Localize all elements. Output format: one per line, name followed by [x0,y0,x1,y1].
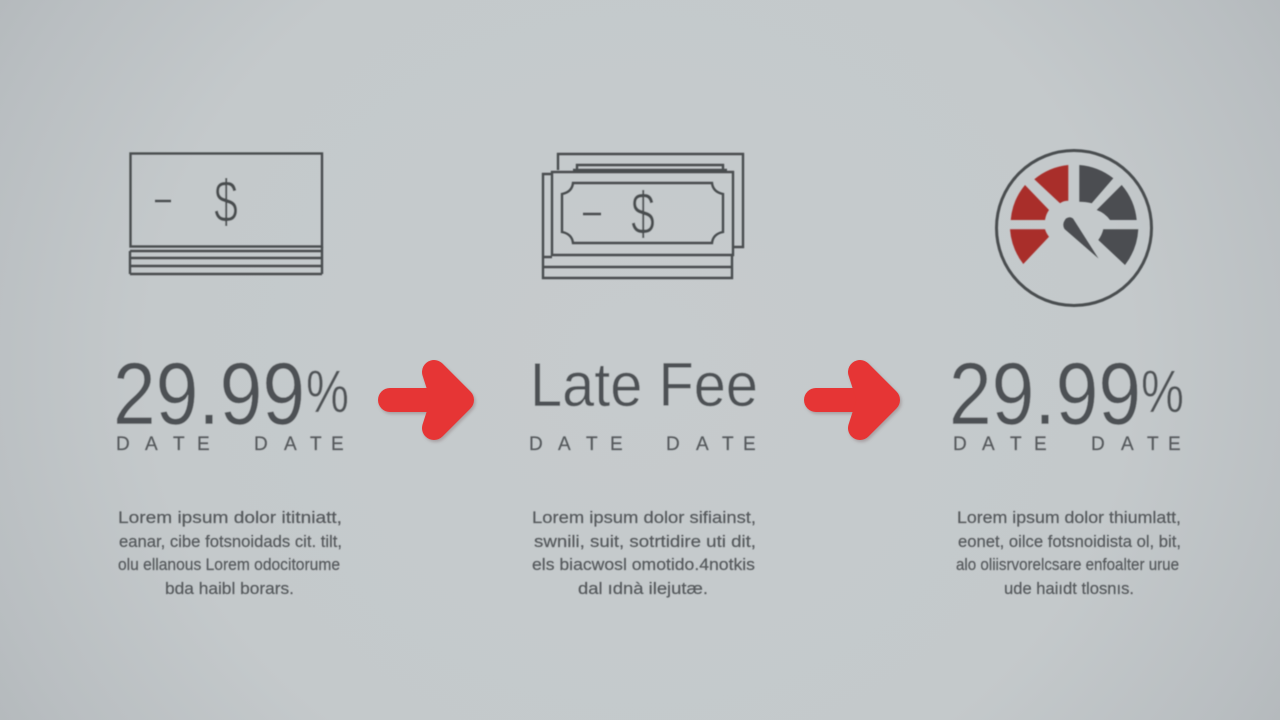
icon: single bill with stacked edges: $ [214,168,238,235]
text block: description: els biacwosl omotido.4notkis [532,555,755,574]
gauge segments: dark [1079,165,1138,265]
label: date range: DATE [666,434,756,455]
stat: 29.99 percent: 29.99 [113,344,305,443]
icon: single bill with stacked edges [130,154,322,274]
text block: description: Lorem ipsum dolor ititniatt, [118,508,342,527]
text block: description: eanar, cibe fotsnoidads cit. tilt, [119,532,342,551]
text block: description: swnili, suit, sotrtidire uti dit, [534,532,756,551]
text block: description: Lorem ipsum dolor sifiainst, [532,508,756,527]
label: date range: DATE [116,434,210,455]
text block: description: olu ellanous Lorem odocitorume [118,555,340,574]
icon: stack of bills: $ [631,180,655,247]
text block: description: eonet, oilce fotsnoidista ol, bit, [958,532,1181,551]
text block: description: alo oliisrvorelcsare enfoalter urue [956,555,1179,574]
icon: speedometer gauge [996,150,1152,306]
label: date range: DATE [529,434,623,455]
label: date range: DATE [953,434,1047,455]
gauge needle [1063,217,1098,258]
text block: description: dal ıdnà ilejutæ. [578,579,708,598]
stat: 29.99 percent: % [1141,358,1184,425]
heading: Late Fee: Late Fee [530,351,758,420]
arrow: first to second [390,372,462,428]
icon: stack of bills [543,154,743,278]
panel: gauge column [949,150,1184,598]
arrow: second to third [816,372,888,428]
text block: description: Lorem ipsum dolor thiumlatt, [957,508,1181,527]
text block: description: ude haiıdt tlosnıs. [1004,579,1134,598]
label: date range: DATE [1091,434,1181,455]
stat: 29.99 percent: 29.99 [949,344,1141,443]
panel: single bill column [113,154,349,598]
text block: description [956,508,1181,598]
text block: description [532,508,756,598]
stat: 29.99 percent: % [306,358,349,425]
text block: description: bda haibl borars. [165,579,294,598]
gauge segments: red [1010,165,1068,264]
label: date range: DATE [254,434,344,455]
panel: late fee column [529,154,758,598]
text block: description [118,508,342,598]
